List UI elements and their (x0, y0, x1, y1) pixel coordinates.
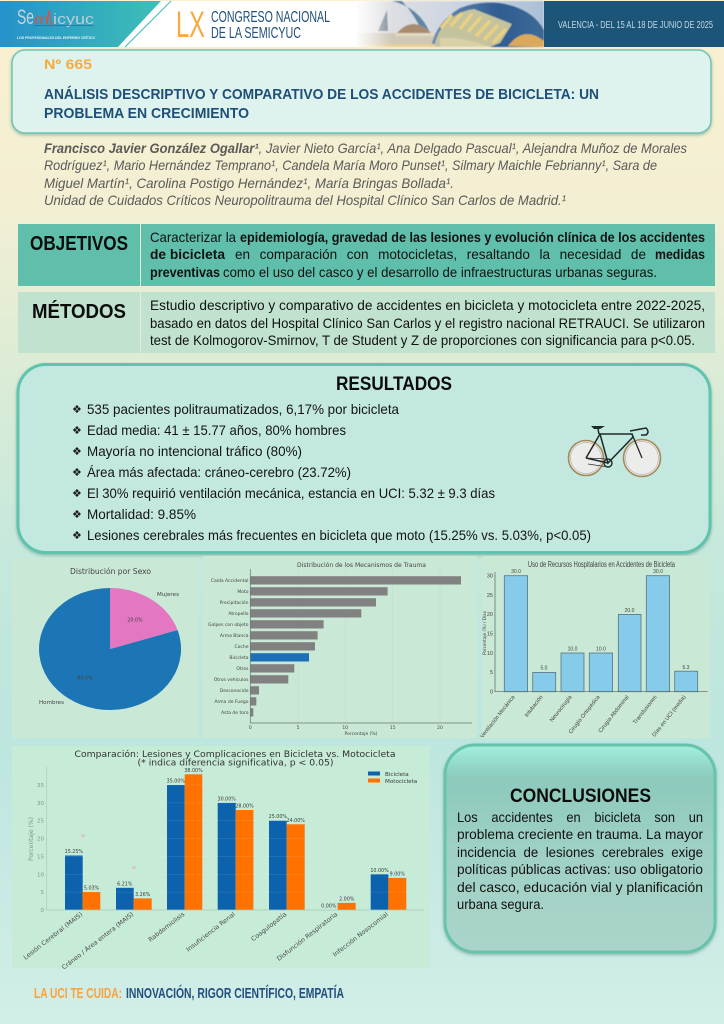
chart: distribución de los mecanismos de trauma (203, 556, 477, 738)
métodos text: Estudio descriptivo y comparativo de accidentes en bicicleta y motocicleta entre 2022-2025, (150, 297, 705, 313)
y axis labels: 15 (37, 854, 44, 860)
logo block: Semicyuc: LOS PROFESIONALES DEL ENFERMO CRÍTICO (17, 35, 95, 40)
rotated category labels: Intubación (524, 695, 545, 719)
bar value labels: 6.21% (117, 881, 133, 887)
value axis: Porcentaje (%) (345, 731, 378, 737)
pie slice: hombres (39, 588, 181, 710)
heading: métodos: MÉTODOS (32, 300, 126, 323)
rotated category labels: Insuficiencia Renal (185, 911, 237, 954)
results bullet list: El 30% requirió ventilación mecánica, estancia en UCI: 5.32 ± 9.3 días (87, 485, 495, 501)
conclusions text (457, 809, 703, 912)
category labels: Atropello (228, 611, 249, 617)
poster title: PROBLEMA EN CRECIMIENTO (44, 105, 249, 122)
panel: métodos (18, 292, 715, 353)
objetivos text: en comparación con motocicletas, resaltando la necesidad de (235, 246, 646, 262)
rotated category labels: Neurocirugía (549, 694, 574, 723)
category labels: Desconocido (220, 688, 249, 694)
objetivos text: de bicicleta (150, 246, 225, 262)
bar value labels: 10.0 (568, 646, 578, 652)
y axis labels: 0 (40, 908, 44, 914)
results bullet list: ❖ (72, 424, 82, 437)
objetivos text: medidas (655, 246, 705, 262)
header image: Valencia architecture (355, 1, 544, 47)
category labels: Moto (237, 589, 249, 595)
results bullet list: Mayoría no intencional tráfico (80%) (87, 443, 302, 459)
rotated category labels: Ventilación Mecánica (479, 694, 517, 740)
y axis labels: 5 (490, 670, 493, 676)
category labels: Arma de Fuego (214, 699, 249, 705)
y axis labels: Porcentaje (%) (28, 817, 35, 861)
heading: resultados: RESULTADOS (336, 374, 452, 395)
comparison chart title: (* indica diferencia significativa, p < 0.05) (138, 758, 334, 768)
bar value labels: 25.00% (269, 814, 287, 820)
y axis labels: 35 (37, 783, 44, 789)
bar value labels: 38.00% (184, 768, 203, 774)
y axis labels: 15 (487, 632, 493, 638)
bar value labels: 2.00% (339, 896, 355, 902)
results bullet list: ❖ (72, 445, 82, 458)
rotated category labels (22, 909, 390, 971)
category labels: Coche (234, 644, 249, 650)
value axis: 5 (297, 725, 300, 731)
legend: Bicicleta (385, 772, 409, 778)
bar value labels: 30.0 (511, 569, 521, 575)
results bullet list: Lesiones cerebrales más frecuentes en bicicleta que moto (15.25% vs. 5.03%, p<0.05) (87, 527, 591, 543)
objetivos text (150, 229, 705, 280)
congress title: DE LA SEMICYUC (211, 25, 301, 42)
comparison chart title (74, 749, 396, 768)
objetivos text: Caracterizar la (150, 229, 236, 245)
results bullet list: Mortalidad: 9.85% (87, 506, 196, 522)
category labels: Otros vehículos (214, 676, 249, 683)
value axis: 0 (249, 725, 252, 731)
y axis labels (28, 783, 44, 914)
bar value labels: 35.00% (167, 778, 185, 784)
bar value labels: 10.0 (596, 646, 606, 652)
chart: pie, distribución por sexo (12, 558, 199, 738)
y axis labels: 10 (487, 651, 493, 657)
pie labels: 80.0% (77, 676, 93, 682)
conclusions text: del casco, educación vial y planificación (457, 879, 703, 895)
horizontal bars (250, 576, 461, 716)
rotated category labels (479, 694, 688, 740)
category labels: Arma Blanca (220, 633, 249, 639)
significance asterisks: * (81, 833, 86, 843)
results bullet list: Edad media: 41 ± 15.77 años, 80% hombres (87, 422, 346, 438)
y axis labels: 5 (40, 890, 44, 896)
footer slogan: INNOVACIÓN, RIGOR CIENTÍFICO, EMPATÍA (126, 984, 344, 1002)
authors and affiliation: Unidad de Cuidados Críticos Neuropolitrauma del Hospital Clínico San Carlos de Madrid.¹ (44, 192, 566, 208)
authors and affiliation: Miguel Martín¹, Carolina Postigo Hernández¹, María Bringas Bollada¹. (44, 175, 454, 191)
conclusions text: políticas públicas activas: uso obligatorio (457, 861, 703, 877)
results bullet list: ❖ (72, 466, 82, 479)
footer slogan: LA UCI TE CUIDA: (34, 985, 122, 1002)
date strip (544, 1, 724, 47)
bar value labels: 30.0 (653, 569, 663, 575)
bar value labels (511, 569, 690, 672)
category labels (208, 577, 249, 716)
congress title: LX (176, 4, 205, 45)
y axis labels: 0 (490, 690, 493, 696)
poster title: ANÁLISIS DESCRIPTIVO Y COMPARATIVO DE LOS ACCIDENTES DE BICICLETA: UN (44, 86, 599, 103)
category labels: Precipitación (220, 599, 249, 606)
bar value labels: 24.00% (287, 818, 305, 824)
rotated category labels: Lesión Cerebral (MAIS) (22, 910, 84, 962)
rotated category labels: Transfusiones (632, 694, 659, 726)
y axis labels: 10 (37, 872, 44, 878)
pie labels: 20.0% (127, 618, 143, 624)
conclusions text: problema creciente en trauma. La mayor (457, 826, 703, 842)
bar value labels: 28.00% (235, 804, 254, 810)
logo block: Semicyuc: m (34, 11, 49, 27)
logo block: Semicyuc: Se (17, 6, 34, 29)
pie title: Distribución por Sexo (70, 566, 151, 576)
authors and affiliation: Rodríguez¹, Mario Hernández Temprano¹, Candela María Moro Punset¹, Silmary Maichle Febrianny¹, Sara de (44, 157, 657, 173)
objetivos text: preventivas (150, 264, 220, 280)
objetivos text: como el uso del casco y el desarrollo de infraestructuras urbanas seguras. (223, 264, 657, 280)
y axis labels: 30 (487, 574, 493, 580)
results bullet list (72, 401, 591, 543)
category labels: Caída Accidental (211, 577, 248, 584)
pie slice: mujeres (110, 588, 178, 649)
métodos text: test de Kolmogorov-Smirnov, T de Student y Z de proporciones con significancia para p<0.05. (150, 332, 695, 348)
bar value labels: 20.0 (625, 608, 635, 614)
poster title (44, 86, 599, 122)
icon: road bicycle (568, 426, 660, 476)
conclusions text: Los accidentes en bicicleta son un (457, 809, 703, 825)
conclusions text: incidencia de lesiones cerebrales exige (457, 844, 703, 860)
chart: comparación bicicleta vs motocicleta (12, 746, 430, 971)
bar value labels: 5.3 (683, 665, 690, 671)
significance asterisks: * (132, 865, 137, 875)
y axis labels: 20 (487, 612, 493, 618)
bar value labels: 10.00% (370, 868, 389, 874)
significance asterisks (81, 833, 137, 875)
rotated category labels: Infección Nosocomial (331, 910, 390, 958)
rotated category labels: Rabdomiolisis (147, 911, 186, 944)
legend: Motocicleta (385, 779, 417, 785)
footer slogan (34, 984, 344, 1002)
heading: objetivos: OBJETIVOS (30, 233, 128, 255)
y axis labels: 25 (37, 819, 44, 825)
bar value labels: 3.26% (135, 892, 151, 898)
authors and affiliation (44, 140, 687, 208)
congress title (176, 4, 330, 45)
rotated category labels: Disfunción Respiratoria (275, 910, 339, 963)
rotated category labels: Días en UCI (media) (651, 694, 688, 738)
panel: resultados (18, 364, 710, 552)
bar value labels: 5.03% (84, 886, 100, 892)
logo block: Semicyuc: icyuc (53, 11, 95, 28)
bar value labels: 30.00% (218, 796, 236, 802)
pie labels: Hombres (39, 700, 64, 706)
results bullet list: ❖ (72, 508, 82, 521)
chart: uso de recursos hospitalarios: Porcentaje (%) / Días (482, 611, 487, 655)
resource bars (504, 576, 698, 692)
category labels: Otros (236, 666, 249, 672)
métodos text (150, 297, 705, 348)
results bullet list: Área más afectada: cráneo-cerebro (23.72%) (87, 464, 351, 480)
header banner (0, 1, 724, 47)
rotated category labels: Cráneo / Área entera (MAIS) (60, 909, 135, 971)
rotated category labels: Cirugía Ortopédica (568, 694, 602, 735)
value axis (249, 725, 443, 737)
results bullet list: ❖ (72, 487, 82, 500)
chart: uso de recursos hospitalarios (479, 556, 710, 740)
bar value labels: 9.00% (390, 871, 405, 877)
y axis labels: 20 (37, 837, 44, 843)
results bullet list: ❖ (72, 529, 82, 542)
motocicleta bars (83, 774, 406, 910)
bar value labels (65, 768, 405, 910)
panel: objetivos (18, 224, 715, 286)
panel: conclusiones (445, 745, 715, 952)
panel: title (12, 50, 711, 133)
bar value labels: 5.0 (541, 666, 548, 672)
category labels: Asta de toro (221, 710, 249, 716)
category labels: Golpes con objeto (208, 622, 249, 628)
bar value labels: 15.25% (65, 849, 83, 855)
abstract number: Nº 665 (44, 56, 92, 72)
category labels: Bicicleta (229, 655, 249, 661)
logo block: Semicyuc (0, 1, 171, 47)
legend (368, 772, 417, 785)
value axis: 15 (390, 725, 396, 731)
results bullet list: ❖ (72, 403, 82, 416)
rotated category labels: Cirugía Abdominal (598, 695, 631, 734)
y axis labels (487, 574, 493, 696)
comparison chart title: Comparación: Lesiones y Complicaciones en Bicicleta vs. Motocicleta (74, 749, 396, 760)
y axis labels: 30 (37, 801, 44, 807)
pie labels (39, 592, 179, 706)
authors and affiliation: Francisco Javier González Ogallar¹, Javier Nieto García¹, Ana Delgado Pascual¹, Alejandra Muñoz de Morales (44, 140, 687, 156)
results bullet list: 535 pacientes politraumatizados, 6,17% por bicicleta (87, 401, 399, 417)
pie labels: Mujeres (157, 592, 179, 598)
rotated category labels: Coagulopatía (249, 910, 288, 943)
bar chart title: Distribución de los Mecanismos de Trauma (297, 561, 426, 569)
value axis: 20 (437, 725, 443, 731)
congress title: CONGRESO NACIONAL (211, 9, 330, 26)
y axis labels: 25 (487, 593, 493, 599)
bar value labels: 0.00% (321, 904, 337, 910)
bicicleta bars (65, 785, 388, 910)
heading: conclusiones: CONCLUSIONES (510, 786, 651, 807)
value axis: 10 (342, 725, 348, 731)
conclusions text: urbana segura. (457, 896, 544, 912)
